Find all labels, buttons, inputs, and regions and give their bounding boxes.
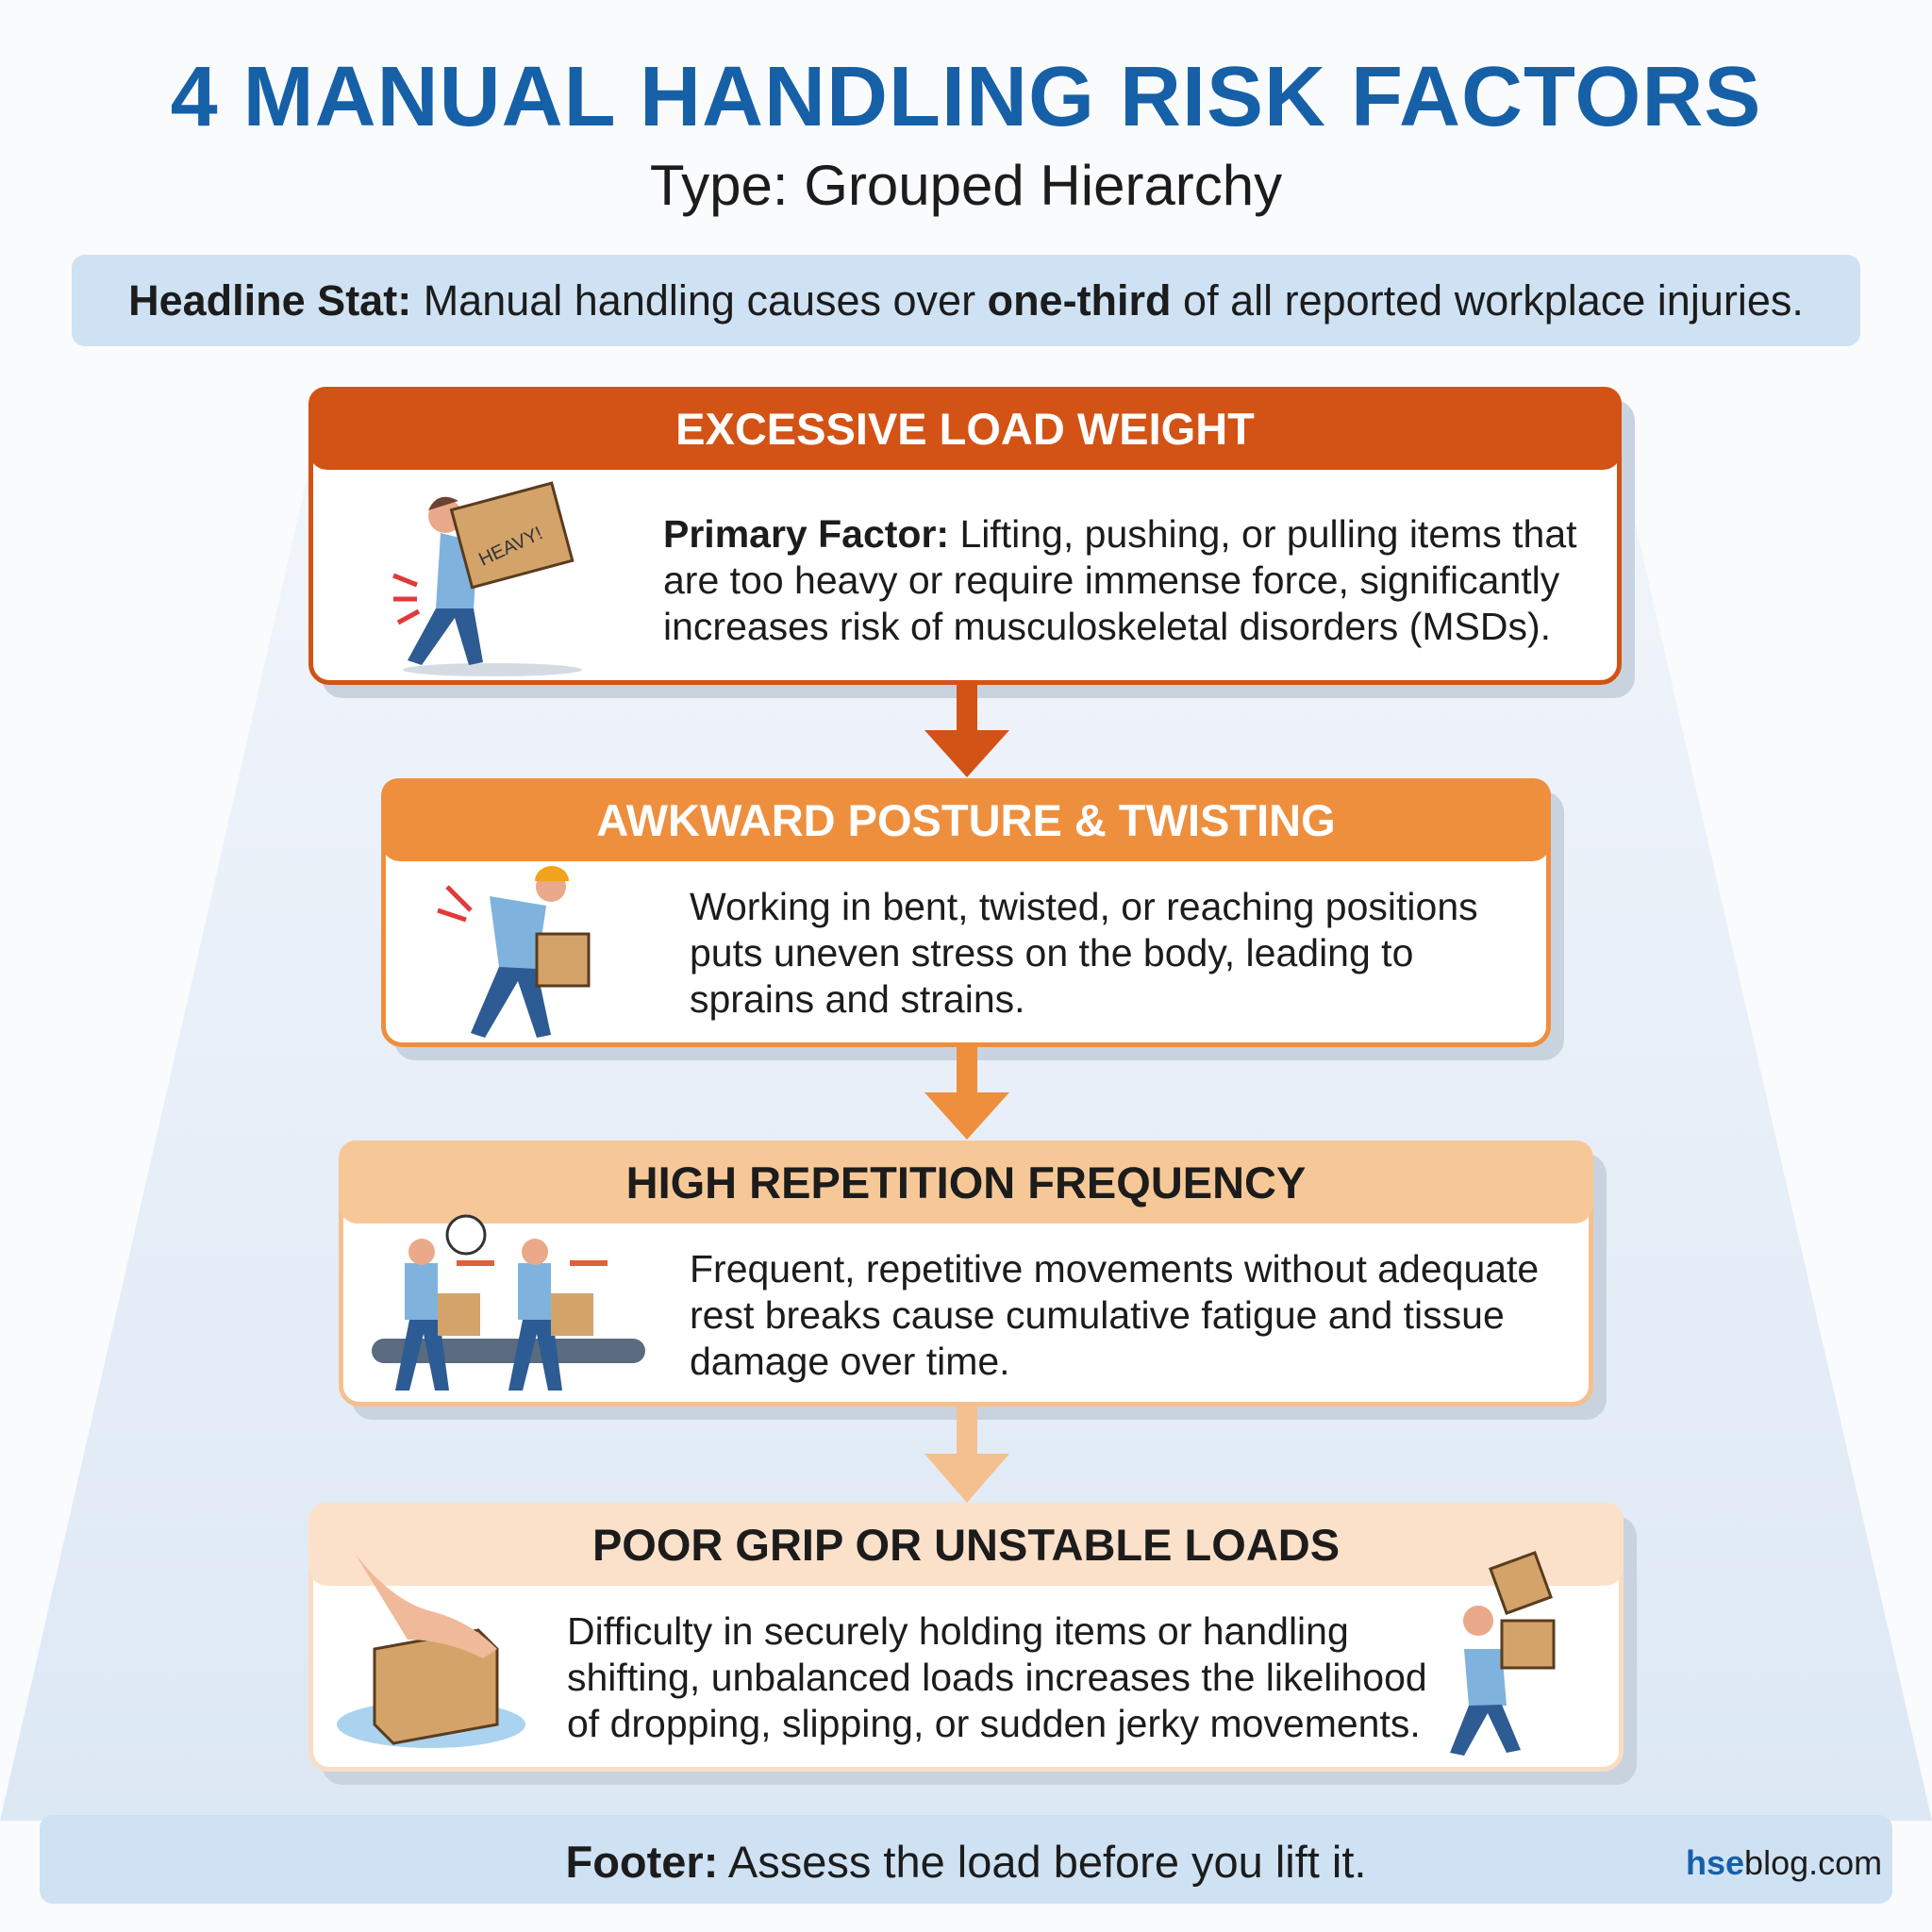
text bbox=[567, 1609, 1427, 1745]
heading: HIGH REPETITION FREQUENCY bbox=[626, 1157, 1306, 1208]
icon: worker lifting heavy box: HEAVY! bbox=[475, 523, 546, 571]
text: are too heavy or require immense force, significantly bbox=[663, 558, 1559, 602]
headline stat: Headline Stat: Manual handling causes over one-third of all reported workplace injuries. bbox=[128, 275, 1804, 325]
arrow 2 bbox=[924, 1047, 1009, 1140]
text: Frequent, repetitive movements without adequate bbox=[690, 1247, 1539, 1291]
arrow 1 bbox=[924, 685, 1009, 777]
arrow 3 bbox=[924, 1407, 1009, 1503]
brand: hseblog.com bbox=[1686, 1843, 1882, 1882]
icon: conveyor workers bbox=[372, 1215, 645, 1391]
title: 4 MANUAL HANDLING RISK FACTORS bbox=[171, 50, 1761, 144]
footer bbox=[40, 1815, 1892, 1904]
heading bbox=[308, 387, 1622, 470]
heading: AWKWARD POSTURE & TWISTING bbox=[596, 794, 1336, 845]
subtitle: Type: Grouped Hierarchy bbox=[650, 154, 1282, 217]
icon: bent worker bbox=[437, 866, 591, 1038]
text bbox=[690, 1247, 1539, 1383]
text: of dropping, slipping, or sudden jerky movements. bbox=[567, 1702, 1421, 1745]
text: puts uneven stress on the body, leading to bbox=[690, 931, 1413, 974]
heading bbox=[339, 1141, 1593, 1224]
icon: worker lifting heavy box bbox=[392, 481, 582, 676]
panel: high repetition bbox=[339, 1141, 1593, 1407]
icon: wet box with hand bbox=[337, 1555, 525, 1748]
text: rest breaks cause cumulative fatigue and tissue bbox=[690, 1293, 1505, 1337]
icon: worker with falling boxes bbox=[1450, 1551, 1555, 1756]
text: Difficulty in securely holding items or handling bbox=[567, 1609, 1349, 1653]
text: Primary Factor: Lifting, pushing, or pulling items that bbox=[663, 512, 1577, 556]
text: damage over time. bbox=[690, 1340, 1010, 1383]
panel: excessive load weight bbox=[308, 387, 1622, 685]
footer text: Footer: Assess the load before you lift it. bbox=[566, 1837, 1366, 1887]
text: increases risk of musculoskeletal disorders (MSDs). bbox=[663, 605, 1551, 648]
text: sprains and strains. bbox=[690, 977, 1025, 1021]
text: shifting, unbalanced loads increases the likelihood bbox=[567, 1656, 1427, 1699]
heading bbox=[308, 1503, 1624, 1586]
headline stat bbox=[72, 255, 1860, 346]
panel: poor grip bbox=[308, 1503, 1624, 1772]
text bbox=[663, 512, 1577, 648]
panel: awkward posture bbox=[381, 778, 1551, 1047]
heading: EXCESSIVE LOAD WEIGHT bbox=[675, 404, 1255, 453]
heading: POOR GRIP OR UNSTABLE LOADS bbox=[592, 1519, 1340, 1570]
heading bbox=[381, 778, 1551, 861]
text bbox=[690, 885, 1478, 1021]
text: Working in bent, twisted, or reaching positions bbox=[690, 885, 1478, 928]
